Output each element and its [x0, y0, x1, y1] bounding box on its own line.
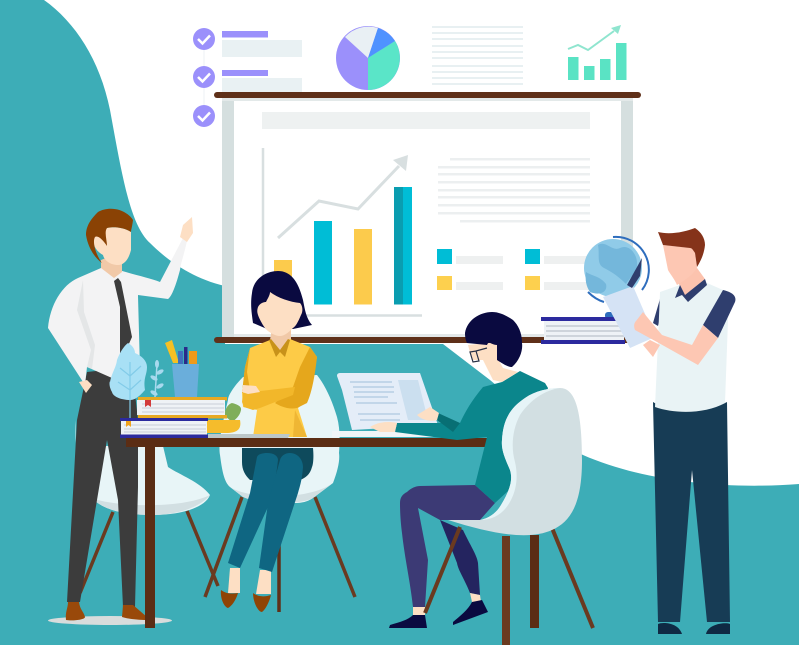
person: man right	[603, 228, 735, 634]
board legend	[437, 249, 591, 290]
pie chart	[336, 26, 400, 90]
table	[126, 438, 539, 628]
woman in yellow	[221, 271, 317, 612]
chair: front	[425, 388, 593, 645]
board text lines	[438, 158, 590, 222]
small bar chart with arrow	[568, 25, 626, 80]
books on the right and globe	[541, 237, 649, 344]
chair: middle	[205, 375, 355, 612]
text lines panel	[432, 26, 523, 85]
desk items: books, plant, cups	[110, 340, 290, 438]
laptop	[332, 373, 440, 437]
chair: left	[76, 420, 218, 593]
person: man left	[48, 209, 193, 625]
board bar chart	[263, 148, 422, 316]
presentation board	[214, 92, 641, 343]
man seated	[370, 312, 548, 628]
icons: checklist	[193, 28, 302, 127]
background: white blob	[44, 0, 799, 486]
